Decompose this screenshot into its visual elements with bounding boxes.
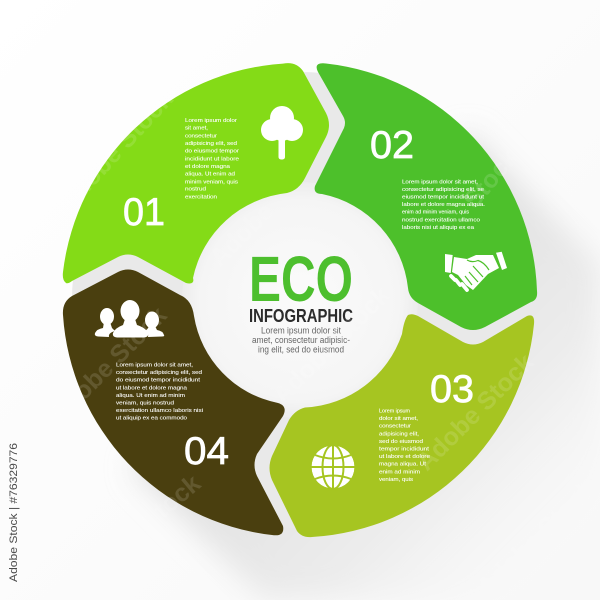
text block 01: sit amet, [185,126,208,132]
text block 01: incididunt ut labore [185,156,239,162]
text block 04: exercitation ullamco laboris nisi [116,408,203,414]
text block 04: aliqua. Ut enim ad minim [116,393,185,399]
number 04: 04 [184,430,229,473]
text block 03: ut labore et dolore [379,454,430,460]
text block 04: ut aliquip ex ea commodo [116,416,187,422]
text block 02 [402,180,485,231]
watermark text: Adobe Stock [411,348,539,476]
centre text block [252,326,350,356]
text block 02: nostrud exercitation ullamco [402,217,480,223]
text block 02: labore et dolore magna aliqua. [402,202,485,208]
text block 02: Lorem ipsum dolor sit amet, [402,180,478,186]
panel: segment 03 [270,314,534,537]
text block 04: veniam, quis nostrud [116,400,174,406]
centre text block: ing elit, sed do eiusmod [258,344,344,356]
text block 01: aliqua. Ut enim ad [185,172,235,178]
watermark text: Stock [458,144,523,214]
text block 03: Lorem ipsum [379,408,410,414]
text block 01: et dolore magna [185,164,231,170]
text block 04: Lorem ipsum dolor sit amet, [116,362,193,368]
watermark text: Stock [136,469,206,535]
centre text block: amet, consectetur adipisic- [252,335,350,346]
panel: segment 02 [315,63,537,330]
text block 02: enim ad minim veniam, quis [402,210,469,216]
text block 03: dolor sit amet, [379,416,418,422]
number 03: 03 [430,368,474,411]
icon: tree [261,106,303,160]
text block 01 [185,118,239,200]
panel: segment 04 [63,270,285,535]
credit text: Adobe Stock | #76329776 [8,443,20,582]
text block 01: Lorem ipsum dolor [185,118,237,124]
watermark text: Adobe Stock [54,85,179,216]
text block 01: exercitation [185,194,217,200]
watermark text: Adobe Stock [472,475,600,600]
text block 03: veniam, quis [379,477,413,483]
text block 03: magna aliqua. Ut [379,462,426,468]
text block 03: adipisicing elit, [379,431,419,437]
ring backing [72,72,528,528]
text block 03: consectetur [379,424,411,430]
text block 04: do eiusmod tempor incididunt [116,378,200,384]
text block 03: tempor incididunt [379,446,429,452]
centre text block: Lorem ipsum dolor sit [261,326,341,336]
text block 04: consectetur adipisicing elit, sed [116,370,202,376]
text block 02: consectetur adipisicing elit, se [402,187,484,193]
watermark text: Adobe Stock [267,281,395,409]
watermark text [44,85,600,600]
icon: handshake [445,252,507,290]
icon: globe [310,444,356,490]
text block 01: do eiusmod tempor [185,149,239,155]
text block 04 [116,362,203,422]
text block 01: minim veniam, quis [185,179,238,185]
panel: segment 01 [63,63,329,283]
text block 04: ut labore et dolore magna [116,385,188,391]
text block 01: adipisicing elit, sed [185,141,237,147]
icon: people [95,300,164,338]
number 01: 01 [123,191,165,234]
text block 02: eiusmod tempor incididunt ut [402,195,484,201]
subtitle: INFOGRAPHIC: INFOGRAPHIC [249,306,353,326]
watermark text: Adobe Stock [44,301,172,429]
watermark text: Adobe [204,197,279,272]
text block 01: nostrud [185,187,206,193]
text block 03: enim ad minim [379,469,420,475]
title: ECO: ECO [249,243,353,315]
centre disc [182,182,418,418]
number 02: 02 [370,124,414,167]
text block 03 [379,408,430,483]
text block 02: laboris nisi ut aliquip ex ea [402,225,475,231]
text block 01: consectetur [185,133,217,139]
text block 03: sed do eiusmod [379,439,423,445]
